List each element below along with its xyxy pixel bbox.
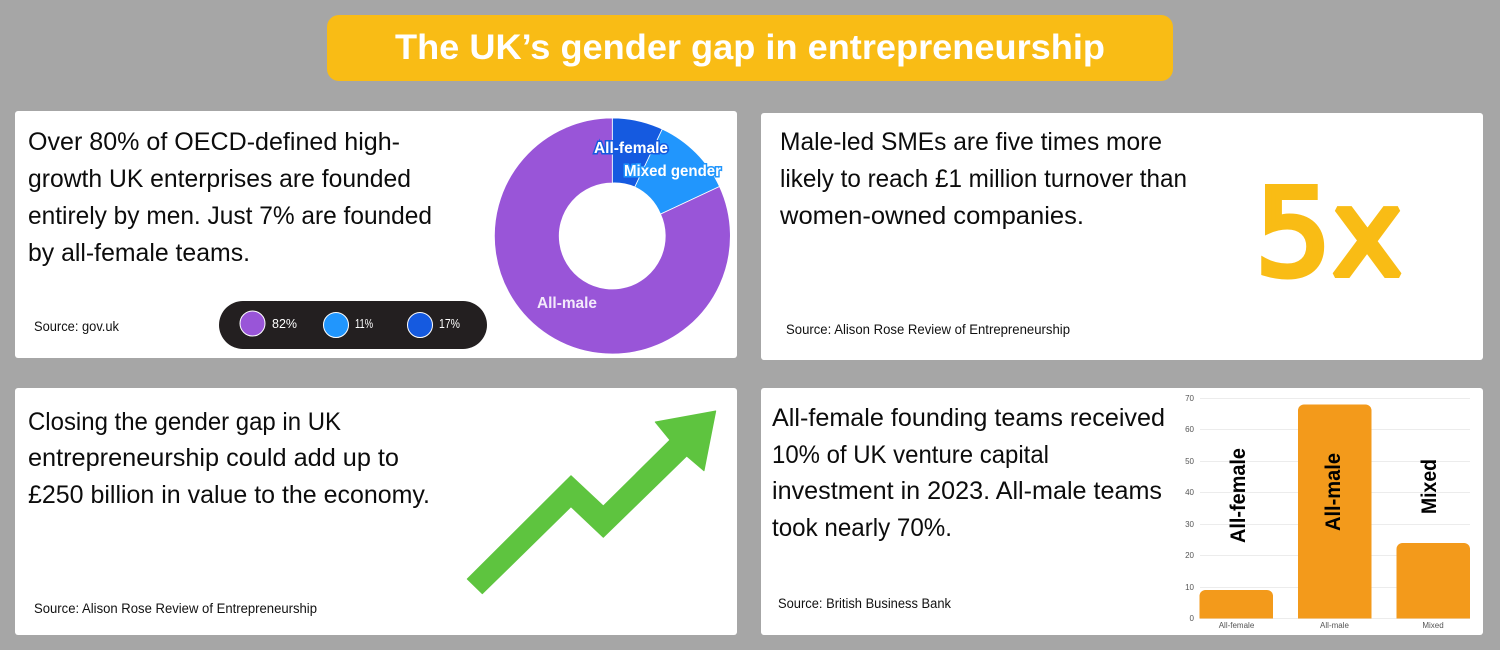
legend: 11% <box>355 316 373 331</box>
text: economy statistic: entrepreneurship could add up to <box>28 444 399 472</box>
bar label: Mixed: Mixed <box>1418 459 1441 514</box>
title banner: The UK’s gender gap in entrepreneurship <box>395 28 1105 67</box>
category axis labels: All-female <box>1219 621 1255 630</box>
text: venture capital statistic: took nearly 70%. <box>772 514 952 542</box>
text: venture capital statistic: 10% of UK venture capital <box>772 441 1049 469</box>
text: venture capital statistic: investment in 2023. All-male teams <box>772 477 1162 505</box>
source: Alison Rose Review: Source: Alison Rose Review of Entrepreneurship <box>786 322 1070 337</box>
bar chart: 60 <box>1185 425 1195 434</box>
text: high-growth statistic: by all-female teams. <box>28 239 250 267</box>
source: Alison Rose Review: Source: Alison Rose Review of Entrepreneurship <box>34 601 317 616</box>
text: turnover statistic: likely to reach £1 million turnover than <box>780 165 1187 193</box>
bar chart: 20 <box>1185 551 1195 560</box>
donut chart <box>494 118 730 354</box>
bar chart: 40 <box>1185 488 1195 497</box>
text: economy statistic: £250 billion in value to the economy. <box>28 481 430 509</box>
bar chart: 50 <box>1185 457 1195 466</box>
donut label: All-male: All-male <box>537 295 597 312</box>
text: turnover statistic <box>779 128 1187 230</box>
text: high-growth statistic <box>28 128 432 267</box>
category axis labels <box>1219 621 1444 630</box>
bar chart <box>1185 394 1470 630</box>
donut label: Mixed gender: Mixed gender <box>624 163 721 180</box>
text: venture capital statistic: All-female founding teams received <box>772 404 1165 432</box>
panel: venture capital <box>761 388 1483 635</box>
source: British Business Bank: Source: British Business Bank <box>778 596 951 611</box>
text: venture capital statistic <box>772 404 1165 542</box>
bar label: All-female: All-female <box>1227 448 1250 543</box>
text: high-growth statistic: growth UK enterprises are founded <box>28 165 411 193</box>
category axis labels: All-male <box>1320 621 1349 630</box>
text: turnover statistic: Male-led SMEs are five times more <box>780 128 1162 156</box>
panel: economic value <box>15 388 737 635</box>
text: economy statistic: Closing the gender gap in UK <box>28 408 341 436</box>
text: economy statistic <box>28 408 430 509</box>
panel: five times <box>761 113 1483 360</box>
icon: rising green arrow <box>467 411 716 594</box>
bar: All-female <box>1200 590 1273 618</box>
bar label: All-male: All-male <box>1322 453 1345 531</box>
legend <box>219 301 487 349</box>
bar chart: 10 <box>1185 583 1195 592</box>
legend: 82% <box>272 316 297 331</box>
bar: All-male <box>1298 404 1372 618</box>
legend: 17% <box>439 316 460 331</box>
category axis labels: Mixed <box>1422 621 1444 630</box>
bar chart: 70 <box>1185 394 1195 403</box>
bar chart: 0 <box>1190 614 1195 623</box>
panel: high-growth founders <box>15 111 737 358</box>
text: turnover statistic: women-owned companies. <box>779 202 1084 230</box>
big figure: 5x: 5x <box>1255 165 1403 304</box>
text: high-growth statistic: entirely by men. Just 7% are founded <box>28 202 432 230</box>
source: gov.uk: Source: gov.uk <box>34 319 119 334</box>
title banner <box>327 15 1173 81</box>
donut label: All-female: All-female <box>594 140 668 157</box>
text: high-growth statistic: Over 80% of OECD-defined high- <box>28 128 400 156</box>
bar chart: 30 <box>1185 520 1195 529</box>
bar: Mixed <box>1396 543 1470 618</box>
